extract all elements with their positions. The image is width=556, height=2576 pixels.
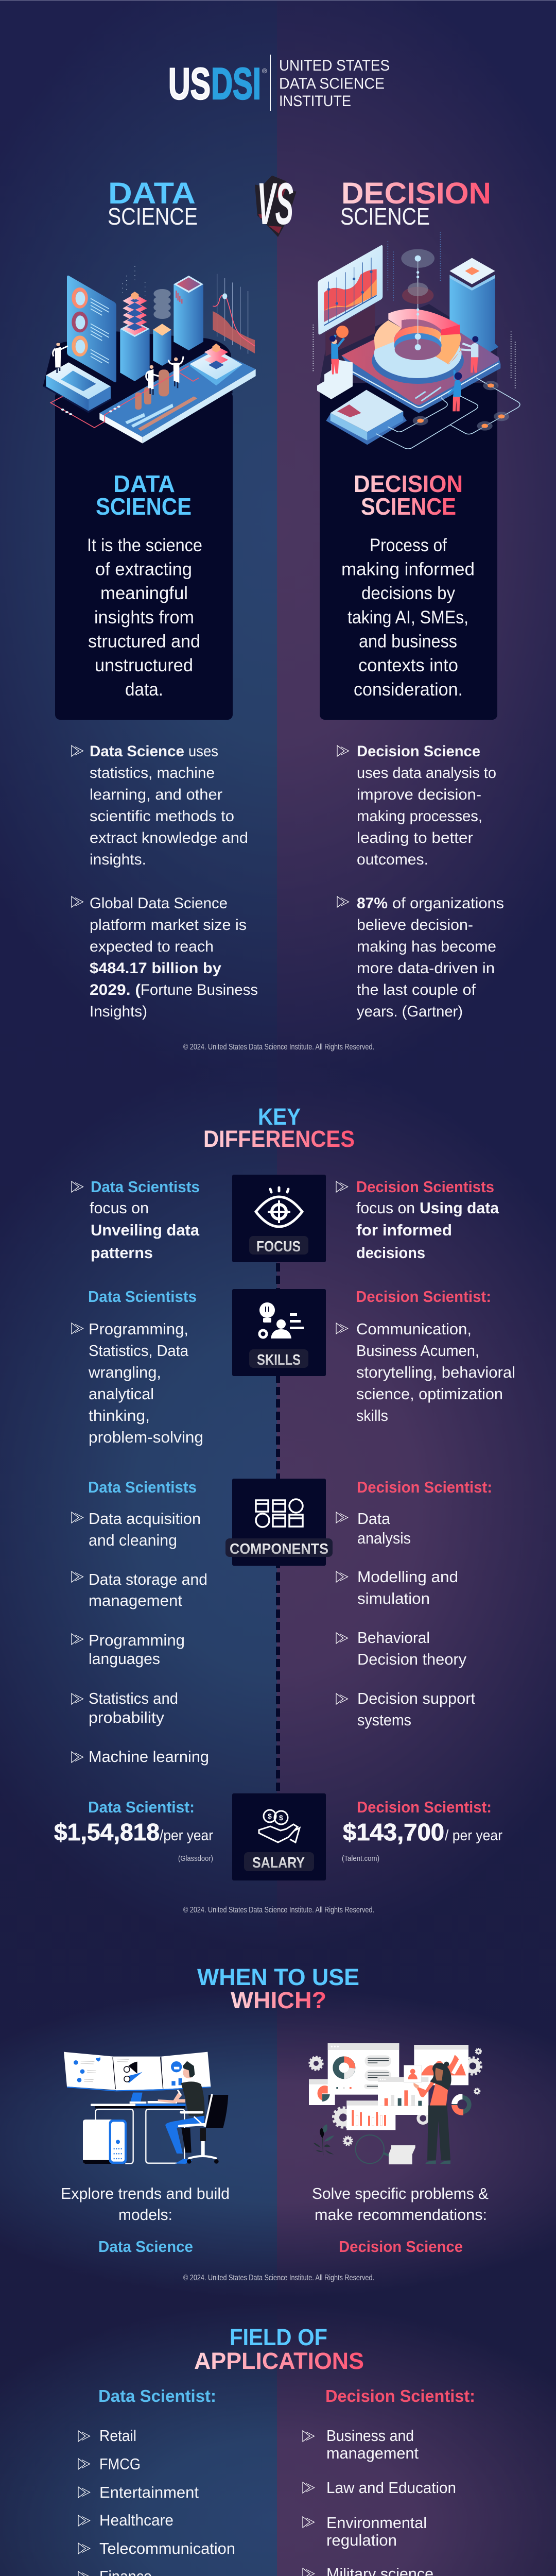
salary right: (Talent.com): [342, 1854, 379, 1863]
focus card: FOCUS: [256, 1239, 301, 1255]
title: decision science: DECISION: [341, 177, 491, 210]
skills left text: analytical: [89, 1385, 154, 1403]
heading: key differences: DIFFERENCES: [203, 1126, 355, 1152]
bullet: data science methods: learning, and other: [90, 786, 222, 803]
components right text: systems: [357, 1711, 411, 1729]
bullet: 87 percent statistic: 87%: [357, 895, 388, 912]
top hairline: [0, 0, 556, 1]
institute name: DATA SCIENCE: [279, 75, 385, 92]
definition text: data science: of extracting: [95, 560, 192, 579]
background glow: when to use: [0, 1989, 556, 2298]
definition text: decision science: consideration.: [354, 680, 463, 700]
focus card: [232, 1175, 326, 1262]
bullet: market size: [72, 895, 258, 1020]
components right text: Data: [357, 1510, 391, 1528]
copyright: © 2024. United States Data Science Institute. All Rights Reserved.: [183, 1043, 374, 1052]
bullet: market size: 2029. (: [90, 981, 141, 998]
components right text: [336, 1478, 492, 1729]
background glow: section 1: [0, 0, 556, 1082]
background glow: field of applications: [0, 2303, 556, 2576]
definition text: decision science: decisions by: [361, 583, 455, 603]
bullet: 87 percent statistic: the last couple of: [357, 981, 476, 998]
focus right text: Decision Scientists: [356, 1178, 494, 1196]
caption: data science: Data Science: [98, 2238, 193, 2256]
components right text: Decision theory: [357, 1650, 466, 1668]
copyright: © 2024. United States Data Science Institute. All Rights Reserved.: [183, 1906, 374, 1914]
copyright: © 2024. United States Data Science Institute. All Rights Reserved.: [183, 2274, 374, 2282]
skills right text: Communication,: [356, 1320, 472, 1338]
icon: skills: [259, 1302, 304, 1338]
skills left text: Data Scientists: [88, 1287, 197, 1306]
salary card: [232, 1793, 326, 1880]
focus left text: [72, 1178, 200, 1262]
bullet: market size: Insights): [90, 1003, 147, 1020]
logo wordmark: ®: [262, 67, 267, 75]
components right text: simulation: [357, 1589, 430, 1607]
bullet: market size: expected to reach: [90, 938, 214, 955]
list: data scientist applications: Telecommunication: [99, 2539, 235, 2557]
focus right text: decisions: [356, 1244, 425, 1262]
bullet: data science methods: uses: [188, 743, 218, 760]
institute name: INSTITUTE: [279, 93, 351, 110]
salary right: Decision Scientist:: [357, 1798, 492, 1816]
heading: field of applications: FIELD OF: [230, 2324, 327, 2350]
focus left text: Data Scientists: [91, 1178, 200, 1196]
logo wordmark: [168, 59, 267, 109]
panel: salary row: [54, 1793, 502, 1880]
definition text: decision science: taking AI, SMEs,: [348, 607, 468, 628]
components left text: Data acquisition: [89, 1510, 201, 1528]
skills right text: science, optimization: [356, 1385, 503, 1403]
logo: [168, 55, 390, 111]
components right text: analysis: [357, 1529, 411, 1547]
skills left text: wrangling,: [88, 1363, 161, 1381]
heading: field of applications: APPLICATIONS: [194, 2348, 364, 2374]
heading: when to use which: [197, 1964, 359, 2013]
list: data scientist applications: Data Scientist:: [98, 2386, 216, 2405]
bullet list: data science facts: [72, 743, 258, 1020]
title: data science: DATA: [108, 177, 196, 210]
definition text: data science: data.: [125, 680, 163, 700]
title: decision science: SCIENCE: [340, 203, 430, 230]
focus left text: Unveiling data: [91, 1221, 200, 1239]
heading: decision science: SCIENCE: [361, 493, 456, 520]
skills left text: thinking,: [89, 1406, 150, 1425]
heading: data science: SCIENCE: [96, 493, 192, 520]
caption: decision science: [312, 2184, 489, 2256]
bullet: 87 percent statistic: [337, 895, 504, 1020]
heading: key differences: KEY: [258, 1104, 301, 1130]
text: VS: [257, 171, 293, 237]
heading: field of applications: [194, 2324, 364, 2374]
list: decision scientist applications: regulation: [326, 2531, 397, 2549]
bullet: 87 percent statistic: of organizations: [392, 895, 504, 912]
components right text: Decision Scientist:: [357, 1478, 492, 1496]
salary right: [342, 1798, 502, 1863]
salary right: / per year: [445, 1827, 502, 1844]
components left text: Statistics and: [89, 1689, 178, 1707]
list: data scientist applications: Healthcare: [99, 2511, 173, 2529]
definition text: data science: structured and: [88, 632, 200, 651]
focus right text: [336, 1178, 499, 1262]
salary card: $: [279, 1814, 283, 1822]
list: decision scientist applications: Business and: [326, 2427, 414, 2445]
skills left text: [72, 1287, 203, 1446]
bullet: data science methods: scientific methods to: [90, 808, 234, 825]
bullet: market size: $484.17 billion by: [90, 960, 221, 977]
salary card: $: [268, 1812, 272, 1820]
salary left: (Glassdoor): [178, 1854, 213, 1863]
heading: data science: DATA: [113, 470, 175, 497]
salary right: $143,700: [343, 1819, 444, 1845]
components left text: Data Scientists: [88, 1478, 197, 1496]
panel: skills row: [72, 1287, 515, 1446]
bullet: decision science methods: making processes,: [357, 808, 482, 825]
bullet: 87 percent statistic: more data-driven in: [357, 960, 495, 977]
VS badge: [255, 171, 297, 237]
definition text: decision science: contexts into: [358, 655, 458, 675]
heading: when to use which: WHEN TO USE: [197, 1964, 359, 1990]
definition text: data science: insights from: [94, 607, 194, 628]
focus left text: patterns: [91, 1244, 153, 1262]
skills left text: problem-solving: [89, 1428, 203, 1446]
heading: decision science: [354, 470, 463, 520]
skills right text: Business Acumen,: [356, 1342, 479, 1360]
bullet: data science methods: [72, 743, 248, 868]
components left text: Programming: [89, 1631, 185, 1649]
icon: components grid: [256, 1499, 303, 1527]
focus right text: focus on: [356, 1199, 415, 1217]
focus right text: Using data: [420, 1199, 499, 1217]
components right text: Decision support: [357, 1689, 475, 1707]
logo wordmark: US: [168, 59, 211, 109]
caption: data science: [61, 2184, 230, 2256]
components card: [225, 1479, 333, 1566]
caption: decision science: Decision Science: [339, 2238, 463, 2256]
bullet: 87 percent statistic: years. (Gartner): [357, 1003, 463, 1020]
definition text: data science: It is the science: [87, 535, 202, 555]
panel: decision science definition: [313, 232, 520, 720]
heading: data science: [96, 470, 192, 520]
institute name: [279, 57, 390, 110]
icon: eye: [256, 1188, 302, 1227]
bullet: data science methods: extract knowledge and: [90, 829, 248, 846]
list: data scientist applications: Entertainment: [99, 2483, 199, 2501]
components right text: Behavioral: [357, 1629, 430, 1647]
list: decision scientist applications: management: [326, 2444, 419, 2462]
heading: decision science: DECISION: [354, 470, 463, 497]
components left text: Data storage and: [89, 1570, 207, 1588]
institute name: UNITED STATES: [279, 57, 390, 74]
panel: when data science: [61, 2052, 230, 2256]
background glow: key differences: [0, 1061, 556, 1947]
bullet list: decision science facts: [337, 743, 504, 1020]
skills card: SKILLS: [257, 1352, 301, 1368]
salary left: [54, 1798, 213, 1863]
panel: focus row: [72, 1175, 499, 1262]
caption: data science: Explore trends and build: [61, 2184, 230, 2202]
panel: when decision science: [309, 2043, 489, 2256]
title: data science: [108, 177, 198, 230]
list: decision scientist applications: Decision Scientist:: [325, 2386, 475, 2405]
title: decision science: [340, 177, 491, 230]
bullet: decision science methods: uses data analysis to: [357, 765, 496, 782]
skills left text: Programming,: [89, 1320, 188, 1338]
caption: decision science: make recommendations:: [315, 2206, 487, 2224]
bullet: market size: Fortune Business: [141, 981, 258, 998]
definition text: decision science: [341, 535, 475, 700]
bullet: data science methods: statistics, machine: [90, 765, 215, 782]
illustration: woman with dashboards: [309, 2043, 481, 2164]
logo wordmark: DSI: [211, 59, 261, 109]
list: decision scientist applications: Environmental: [326, 2514, 427, 2532]
heading: when to use which: WHICH?: [231, 1987, 326, 2013]
components left text: and cleaning: [89, 1531, 177, 1549]
panel: data science definition: [43, 266, 256, 720]
definition text: decision science: Process of: [370, 535, 447, 555]
salary left: Data Scientist:: [88, 1798, 195, 1816]
icon: hand with coins: [259, 1810, 300, 1842]
skills right text: skills: [356, 1406, 388, 1425]
salary left: $1,54,818: [54, 1819, 160, 1845]
illustration: analyst at monitors: [64, 2052, 228, 2164]
caption: decision science: Solve specific problems &: [312, 2184, 489, 2202]
definition text: data science: meaningful: [100, 583, 188, 603]
bullet: decision science methods: [337, 743, 496, 868]
components right text: Modelling and: [357, 1568, 458, 1586]
list: data scientist applications: Retail: [99, 2427, 136, 2445]
caption: data science: models:: [118, 2206, 172, 2224]
bullet: decision science methods: outcomes.: [357, 851, 428, 868]
panel: components row: [72, 1478, 492, 1766]
focus right text: for informed: [356, 1221, 452, 1239]
heading: key differences: [203, 1104, 355, 1152]
bullet: decision science methods: Decision Science: [357, 743, 480, 760]
list: decision scientist applications: Law and Education: [326, 2479, 456, 2497]
components left text: Machine learning: [89, 1748, 209, 1766]
skills left text: Statistics, Data: [89, 1342, 189, 1360]
definition text: data science: unstructured: [95, 655, 193, 675]
definition text: decision science: making informed: [341, 560, 475, 579]
timeline connector: [276, 1263, 280, 1794]
focus left text: focus on: [90, 1199, 149, 1217]
list: data scientist applications: [78, 2386, 235, 2576]
bullet: data science methods: insights.: [90, 851, 146, 868]
bullet: market size: platform market size is: [90, 917, 247, 934]
bullet: market size: Global Data Science: [90, 895, 228, 912]
bullet: 87 percent statistic: making has become: [357, 938, 496, 955]
bullet: decision science methods: leading to better: [357, 829, 473, 846]
skills card: [232, 1289, 326, 1376]
list: data scientist applications: FMCG: [99, 2455, 141, 2473]
salary left: /per year: [160, 1827, 213, 1844]
components card: COMPONENTS: [230, 1541, 328, 1557]
bullet: 87 percent statistic: believe decision-: [357, 917, 473, 934]
illustration: data science isometric: [43, 266, 256, 444]
skills right text: Decision Scientist:: [356, 1287, 491, 1306]
components left text: languages: [89, 1650, 160, 1668]
components left text: management: [89, 1591, 182, 1609]
skills right text: storytelling, behavioral: [356, 1363, 515, 1381]
list: decision scientist applications: [303, 2386, 475, 2576]
components left text: [72, 1478, 209, 1766]
bullet: decision science methods: improve decision-: [357, 786, 481, 803]
illustration: decision science isometric: [313, 232, 520, 449]
bullet: data science methods: Data Science: [90, 743, 184, 760]
components left text: probability: [89, 1708, 165, 1726]
definition text: decision science: and business: [359, 632, 457, 651]
salary card: SALARY: [252, 1855, 305, 1871]
definition text: data science: [87, 535, 202, 700]
skills right text: [336, 1287, 515, 1425]
title: data science: SCIENCE: [108, 203, 198, 230]
